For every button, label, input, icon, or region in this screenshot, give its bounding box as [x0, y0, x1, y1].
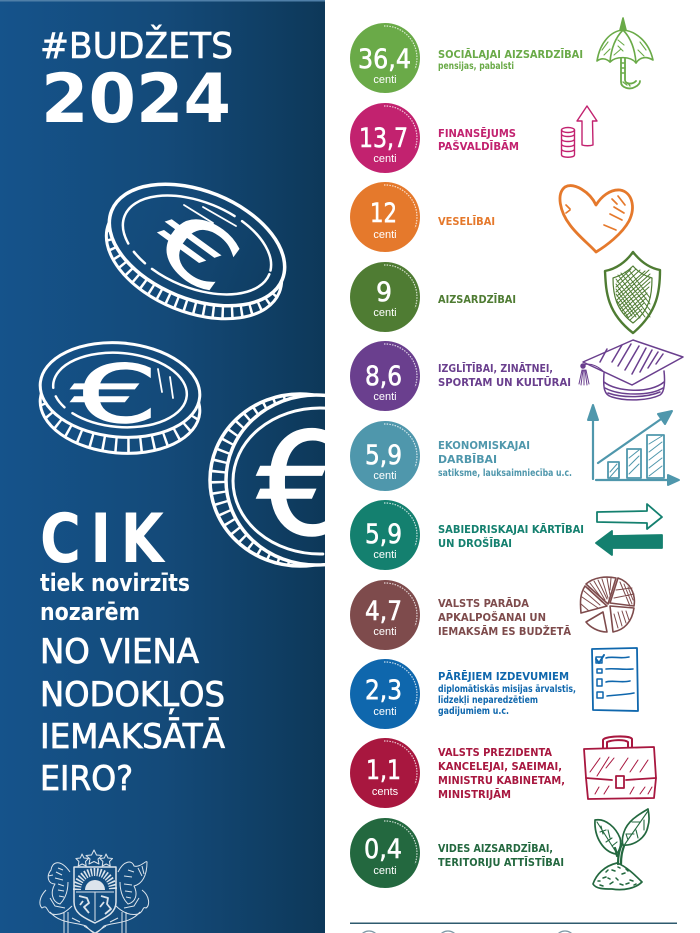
heading: NO VIENA NODOKĻOS IEMAKSĀTĀ EIRO?: NODOKĻOS	[40, 675, 225, 715]
value circle	[350, 659, 420, 729]
label: pensijas, pabalsti	[438, 61, 514, 72]
value circle	[350, 421, 420, 491]
row 11: environment 0,4	[350, 809, 649, 890]
label: DARBĪBAI	[438, 453, 497, 466]
label: VALSTS PREZIDENTA	[438, 747, 553, 759]
value circle	[350, 182, 420, 252]
value circle: centi	[373, 706, 397, 718]
label	[438, 747, 565, 801]
heading: NO VIENA NODOKĻOS IEMAKSĀTĀ EIRO?: EIRO?	[40, 759, 133, 799]
label: satiksme, lauksaimniecība u.c.	[438, 468, 572, 479]
label	[438, 48, 583, 72]
label: IZGLĪTĪBAI, ZINĀTNEI,	[438, 362, 553, 375]
value circle	[350, 103, 420, 173]
row 8: state debt 4,7	[350, 577, 634, 650]
icon: coat of arms of Latvia	[40, 850, 149, 933]
label	[438, 362, 571, 389]
label: līdzekļi neparedzētiem	[438, 695, 538, 706]
title: #BUDŽETS 2024	[40, 25, 233, 139]
label: AIZSARDZĪBAI	[438, 293, 516, 306]
value circle: 5,9	[365, 440, 402, 471]
footer: divider rule and cropped icons	[350, 922, 677, 933]
value circle	[350, 341, 420, 411]
value circle	[350, 818, 420, 888]
label: IEMAKSĀM ES BUDŽETĀ	[438, 625, 572, 638]
label	[438, 670, 576, 717]
label	[438, 597, 572, 638]
title: #BUDŽETS 2024: #BUDŽETS	[40, 25, 233, 67]
value circle: centi	[373, 549, 397, 561]
icon: heart	[560, 186, 632, 252]
value circle: 13,7	[359, 123, 408, 154]
heading: CIK tiek novirzīts nozarēm	[40, 499, 190, 626]
row 3: health 12	[350, 182, 632, 252]
heading: CIK tiek novirzīts nozarēm: nozarēm	[40, 598, 140, 626]
row 2: municipal funding 13,7	[350, 103, 597, 173]
icon: coins and up arrow	[562, 106, 597, 157]
value circle	[350, 738, 420, 808]
icon: briefcase	[584, 736, 656, 799]
value circle	[350, 580, 420, 650]
value circle: 8,6	[365, 361, 402, 392]
label: VIDES AIZSARDZĪBAI,	[438, 842, 553, 855]
value circle: 1,1	[366, 755, 401, 786]
value circle: cents	[372, 786, 399, 798]
title: #BUDŽETS 2024: 2024	[41, 60, 231, 139]
icon: flat euro coin	[38, 341, 202, 455]
label: UN DROŠĪBAI	[438, 537, 512, 550]
label: APKALPOŠANAI UN	[438, 611, 546, 624]
label: SABIEDRISKAJAI KĀRTĪBAI	[438, 523, 584, 536]
row 6: economic activity 5,9	[350, 405, 679, 491]
heading: CIK tiek novirzīts nozarēm: tiek novirzīts	[40, 569, 190, 597]
icon: growth chart	[588, 405, 679, 485]
value circle	[350, 500, 420, 570]
value circle: centi	[373, 307, 397, 319]
icon: plant sprout	[593, 809, 649, 890]
row 9: other expenses 2,3	[350, 648, 638, 729]
value circle	[350, 262, 420, 332]
label: MINISTRU KABINETAM,	[438, 775, 565, 787]
label: PĀRĒJIEM IZDEVUMIEM	[438, 670, 569, 683]
label: SPORTAM UN KULTŪRAI	[438, 376, 571, 389]
value circle: 5,9	[365, 519, 402, 550]
row 4: defence 9	[350, 252, 660, 333]
icon: shield	[605, 252, 660, 333]
icon: tilted euro coin	[104, 182, 286, 320]
icon: two opposing arrows	[596, 504, 662, 555]
label	[438, 842, 564, 869]
value circle: 0,4	[364, 834, 402, 865]
label: VALSTS PARĀDA	[438, 597, 530, 610]
label	[438, 440, 572, 479]
value circle: 4,7	[365, 596, 402, 627]
row 5: education 8,6	[350, 340, 683, 411]
panel: blue left column	[0, 0, 325, 933]
value circle: centi	[373, 865, 397, 877]
heading: NO VIENA NODOKĻOS IEMAKSĀTĀ EIRO?	[40, 632, 225, 799]
label	[438, 127, 519, 153]
value circle: 9	[376, 277, 392, 308]
icon: tilted euro coin: €	[135, 188, 258, 314]
label: MINISTRIJĀM	[438, 788, 511, 801]
icon: flat euro coin: €	[71, 348, 159, 441]
label: VESELĪBAI	[438, 215, 495, 228]
icon: graduation cap	[579, 340, 683, 400]
icon: upright euro coin: €	[257, 403, 347, 568]
label: TERITORIJU ATTĪSTĪBAI	[438, 856, 564, 869]
value circle: 36,4	[358, 44, 411, 75]
value circle: centi	[373, 470, 397, 482]
value circle: 2,3	[365, 675, 402, 706]
value circle	[350, 23, 420, 93]
heading: NO VIENA NODOKĻOS IEMAKSĀTĀ EIRO?: IEMAKSĀTĀ	[40, 717, 225, 757]
label: PAŠVALDĪBĀM	[438, 140, 519, 153]
value circle: 12	[370, 198, 397, 229]
label: diplomātiskās misijas ārvalstis,	[438, 684, 576, 695]
label: SOCIĀLAJAI AIZSARDZĪBAI	[438, 48, 583, 61]
label	[438, 523, 584, 550]
value circle: centi	[373, 626, 397, 638]
icon: checklist	[592, 648, 638, 711]
label: KANCELEJAI, SAEIMAI,	[438, 761, 562, 773]
value circle: centi	[373, 229, 397, 241]
label: FINANSĒJUMS	[438, 127, 516, 140]
icon: upright euro coin	[208, 392, 325, 568]
row 7: public order 5,9	[350, 500, 662, 570]
value circle: centi	[373, 153, 397, 165]
icon: umbrella	[597, 18, 653, 88]
row 10: president and ministries 1,1	[350, 736, 656, 808]
icon: pie chart	[580, 577, 634, 632]
heading: CIK tiek novirzīts nozarēm: CIK	[40, 499, 166, 578]
value circle: centi	[373, 74, 397, 86]
value circle: centi	[373, 391, 397, 403]
label: gadījumiem u.c.	[438, 706, 509, 717]
label: EKONOMISKAJAI	[438, 440, 530, 452]
row 1: social protection 36,4	[350, 18, 653, 93]
heading: NO VIENA NODOKĻOS IEMAKSĀTĀ EIRO?: NO VIENA	[40, 632, 199, 672]
